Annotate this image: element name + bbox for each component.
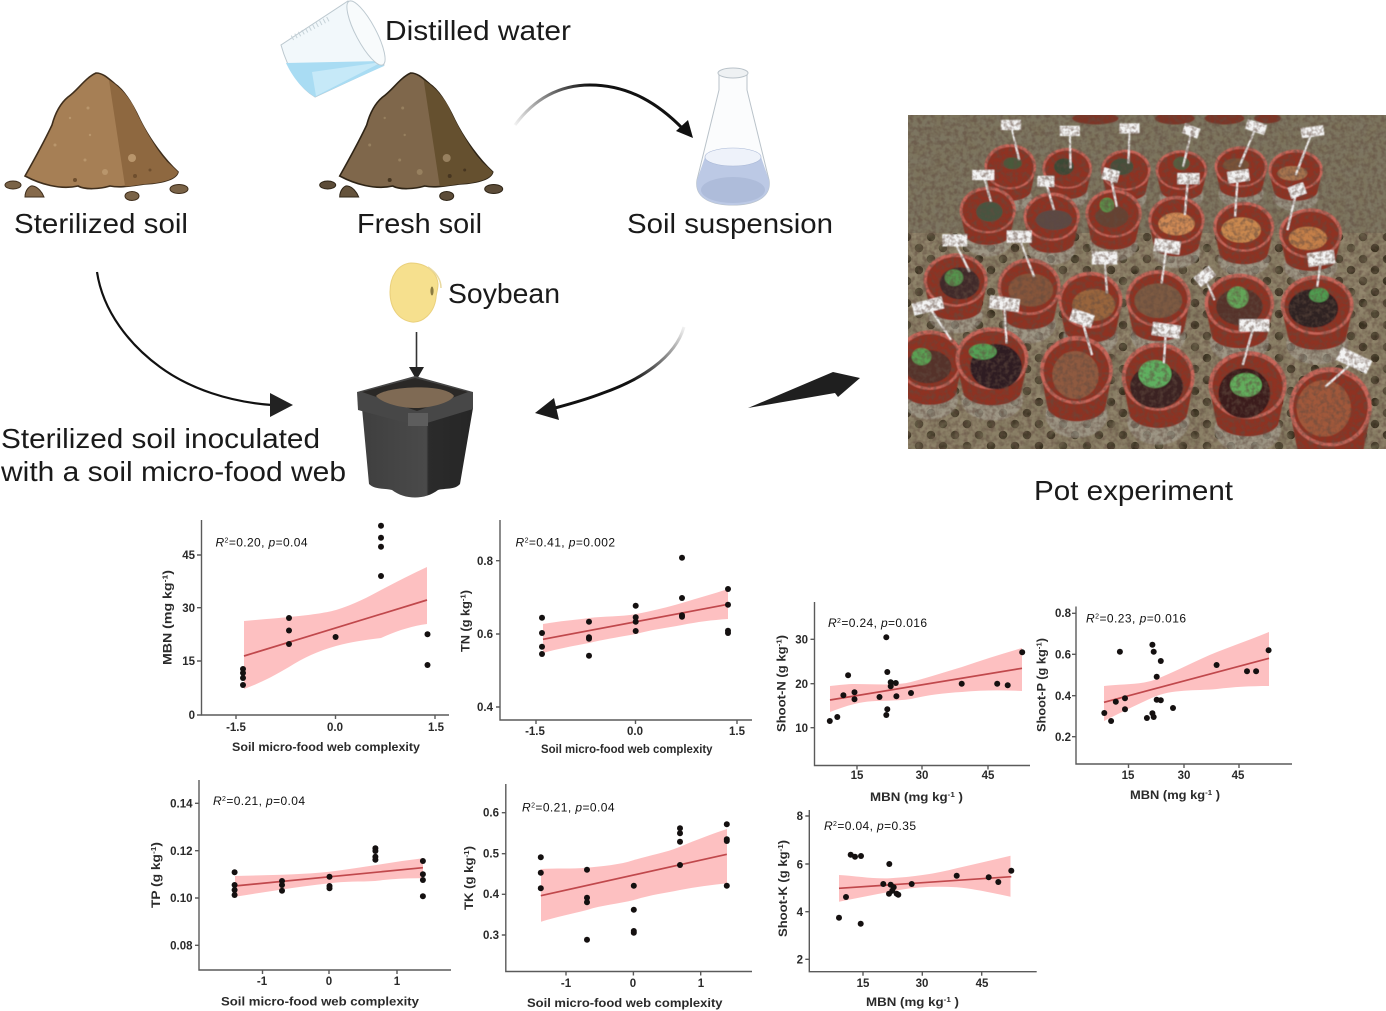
chart: TN vs soil micro-food web complexity: 0.8 <box>477 556 494 568</box>
chart: MBN vs soil micro-food web complexity: Soil micro-food web complexity <box>232 742 421 754</box>
chart: Shoot-P vs MBN: 0.4 <box>1055 691 1072 703</box>
icon: sterilized soil pile <box>5 73 188 200</box>
heading: Pot experiment: Pot experiment <box>1034 475 1233 506</box>
chart: TP vs soil micro-food web complexity: 0.12 <box>170 846 192 858</box>
chart: Shoot-N vs MBN: MBN (mg kg <box>870 792 937 804</box>
chart: MBN vs soil micro-food web complexity: MBN (mg kg <box>162 598 174 665</box>
chart: Shoot-P vs MBN: 0.2 <box>1055 732 1071 744</box>
chart: Shoot-K vs MBN <box>778 810 1037 1009</box>
chart: TN vs soil micro-food web complexity: 1.5 <box>729 726 746 738</box>
chart: Shoot-K vs MBN: -1 <box>944 997 951 1004</box>
chart: TP vs soil micro-food web complexity: =0.21, <box>226 794 266 808</box>
row 3 <box>924 253 988 333</box>
chart: TP vs soil micro-food web complexity: 1 <box>394 976 401 988</box>
chart: Shoot-P vs MBN: -1 <box>1036 642 1044 649</box>
chart: Shoot-K vs MBN: 2 <box>797 954 803 966</box>
chart: TN vs soil micro-food web complexity: =0.41, <box>529 536 568 550</box>
chart: Shoot-N vs MBN: R <box>828 616 837 630</box>
arrow: soybean to pot <box>409 332 424 380</box>
chart: Shoot-K vs MBN: MBN (mg kg <box>866 997 933 1009</box>
chart: Shoot-N vs MBN: =0.24, <box>841 616 881 630</box>
chart: TN vs soil micro-food web complexity: Soil micro-food web complexity <box>541 744 713 756</box>
chart: TN vs soil micro-food web complexity: TN (g kg <box>460 606 472 652</box>
arrow: to pot experiment <box>748 372 860 408</box>
chart: Shoot-P vs MBN: 45 <box>1232 770 1245 782</box>
chart: TK vs soil micro-food web complexity: =0.21, <box>535 800 575 814</box>
chart: MBN vs soil micro-food web complexity: 30 <box>182 603 195 615</box>
chart: MBN vs soil micro-food web complexity: ) <box>162 570 174 575</box>
chart: Shoot-K vs MBN: 6 <box>797 860 803 872</box>
chart: Shoot-P vs MBN: Shoot-P (g kg <box>1036 657 1048 732</box>
chart: Shoot-P vs MBN: 30 <box>1178 770 1190 782</box>
chart: TN vs soil micro-food web complexity: 0.0 <box>627 726 643 738</box>
chart: TK vs soil micro-food web complexity: -1 <box>464 850 471 858</box>
chart: Shoot-N vs MBN: ) <box>955 792 963 804</box>
chart: TK vs soil micro-food web complexity: Soil micro-food web complexity <box>527 998 723 1010</box>
chart: Shoot-N vs MBN: 45 <box>982 770 995 782</box>
icon: soybean seed <box>390 263 441 322</box>
chart: TK vs soil micro-food web complexity: 0.5 <box>483 848 500 860</box>
chart: MBN vs soil micro-food web complexity: 1.5 <box>428 722 445 734</box>
chart: MBN vs soil micro-food web complexity: 15 <box>182 656 196 668</box>
chart: Shoot-N vs MBN: -1 <box>776 639 784 646</box>
chart: Shoot-K vs MBN: 15 <box>857 978 870 990</box>
chart: Shoot-N vs MBN <box>776 602 1030 804</box>
chart: Shoot-K vs MBN: 45 <box>976 978 989 990</box>
heading: Sterilized soil inoculated with a soil micro-food web <box>0 423 346 487</box>
photo: pot experiment <box>908 115 1386 449</box>
chart: MBN vs soil micro-food web complexity: 45 <box>182 550 196 562</box>
chart: Shoot-P vs MBN: p=0.016 <box>1140 612 1186 626</box>
chart: TN vs soil micro-food web complexity: 2 <box>525 538 529 544</box>
chart: MBN vs soil micro-food web complexity: p=0.04 <box>269 536 308 550</box>
chart: Shoot-K vs MBN: 2 <box>833 821 837 828</box>
chart: TP vs soil micro-food web complexity: R <box>213 794 222 808</box>
chart: TP vs soil micro-food web complexity: 0.14 <box>170 798 193 810</box>
chart: Shoot-P vs MBN <box>1036 606 1292 802</box>
heading: Soybean: Soybean <box>448 278 560 309</box>
chart: TP vs soil micro-food web complexity: Soil micro-food web complexity <box>221 996 420 1008</box>
chart: Shoot-P vs MBN: =0.23, <box>1099 612 1139 626</box>
chart: Shoot-N vs MBN: 10 <box>795 723 808 735</box>
chart: Shoot-K vs MBN: -1 <box>778 844 785 851</box>
chart: TP vs soil micro-food web complexity: -1 <box>257 976 268 988</box>
chart: Shoot-K vs MBN: 4 <box>797 907 804 919</box>
chart: TN vs soil micro-food web complexity: p=0.002 <box>569 536 615 550</box>
chart: MBN vs soil micro-food web complexity: R <box>216 536 224 550</box>
chart: TK vs soil micro-food web complexity: 0.6 <box>483 808 499 820</box>
chart: Shoot-P vs MBN: ) <box>1036 638 1048 642</box>
chart: Shoot-N vs MBN: 2 <box>837 618 841 625</box>
chart: TN vs soil micro-food web complexity: ) <box>460 590 472 594</box>
chart: TK vs soil micro-food web complexity: TK (g kg <box>464 864 476 910</box>
chart: Shoot-N vs MBN: 30 <box>795 634 808 646</box>
heading: Sterilized soil inoculated with a soil micro-food web: with a soil micro-food web <box>0 456 346 487</box>
chart: TP vs soil micro-food web complexity: TP (g kg <box>151 863 163 908</box>
chart: Shoot-P vs MBN: 2 <box>1095 614 1099 620</box>
chart: MBN vs soil micro-food web complexity: 0.0 <box>327 722 343 734</box>
chart: Shoot-N vs MBN: 30 <box>916 770 928 782</box>
chart: Shoot-K vs MBN: Shoot-K (g kg <box>778 862 790 937</box>
chart: Shoot-P vs MBN: 0.8 <box>1055 608 1072 620</box>
chart: TK vs soil micro-food web complexity <box>464 784 752 1010</box>
icon: beaker pouring distilled water <box>281 0 392 97</box>
chart: TN vs soil micro-food web complexity <box>460 520 752 756</box>
chart: TK vs soil micro-food web complexity: 0.3 <box>483 930 499 942</box>
row 2 <box>960 187 1016 256</box>
chart: TP vs soil micro-food web complexity: -1 <box>151 846 158 854</box>
chart: TN vs soil micro-food web complexity: 0.4 <box>477 702 494 714</box>
back row <box>984 144 1036 212</box>
row 4 <box>908 330 960 420</box>
chart: Shoot-K vs MBN: R <box>824 819 833 833</box>
chart: TP vs soil micro-food web complexity: 0.08 <box>170 940 193 952</box>
chart: Shoot-K vs MBN: ) <box>951 997 959 1009</box>
chart: Shoot-K vs MBN: =0.04, <box>837 819 877 833</box>
chart: TP vs soil micro-food web complexity <box>151 780 451 1008</box>
chart: TN vs soil micro-food web complexity: -1.5 <box>525 726 546 738</box>
chart: TK vs soil micro-food web complexity: p=0.04 <box>575 800 614 814</box>
chart: TP vs soil micro-food web complexity: 0.10 <box>170 893 192 905</box>
chart: TP vs soil micro-food web complexity: p=0.04 <box>266 794 305 808</box>
arrow: sterilized soil to pot <box>97 272 293 417</box>
chart: TK vs soil micro-food web complexity: 1 <box>698 978 705 990</box>
chart: Shoot-P vs MBN: 0.6 <box>1055 650 1071 662</box>
chart: TK vs soil micro-food web complexity: 2 <box>531 802 535 810</box>
chart: TK vs soil micro-food web complexity: R <box>522 800 531 814</box>
chart: MBN vs soil micro-food web complexity: 2 <box>225 538 229 544</box>
chart: MBN vs soil micro-food web complexity: =0.20, <box>229 536 268 550</box>
chart: TK vs soil micro-food web complexity: 0 <box>630 978 636 990</box>
chart: TK vs soil micro-food web complexity: 0.4 <box>483 889 500 901</box>
icon: flask with soil suspension <box>697 68 769 205</box>
chart: TN vs soil micro-food web complexity: 0.6 <box>477 629 493 641</box>
chart: Shoot-N vs MBN: Shoot-N (g kg <box>776 657 788 732</box>
chart: Shoot-N vs MBN: ) <box>776 635 788 639</box>
chart: MBN vs soil micro-food web complexity <box>162 520 449 754</box>
chart: TP vs soil micro-food web complexity: 2 <box>222 796 226 803</box>
chart: Shoot-P vs MBN: 15 <box>1122 770 1135 782</box>
heading: Fresh soil: Fresh soil <box>357 208 482 239</box>
heading: Sterilized soil: Sterilized soil <box>14 208 188 239</box>
arrow: fresh soil to soil suspension <box>515 85 693 138</box>
icon: fresh soil pile <box>320 73 503 200</box>
chart: Shoot-N vs MBN: -1 <box>948 792 955 799</box>
chart: Shoot-K vs MBN: p=0.35 <box>877 819 916 833</box>
chart: TK vs soil micro-food web complexity: ) <box>464 846 476 850</box>
chart: Shoot-P vs MBN: ) <box>1212 790 1220 802</box>
chart: TP vs soil micro-food web complexity: 0 <box>326 976 332 988</box>
chart: TP vs soil micro-food web complexity: ) <box>151 842 163 847</box>
chart: TK vs soil micro-food web complexity: -1 <box>561 978 572 990</box>
chart: Shoot-P vs MBN: R <box>1086 612 1095 626</box>
chart: Shoot-N vs MBN: 20 <box>795 679 808 691</box>
chart: Shoot-K vs MBN: 30 <box>916 978 928 990</box>
arrow: soil suspension to pot <box>535 327 684 420</box>
chart: MBN vs soil micro-food web complexity: 0 <box>189 710 195 722</box>
heading: Sterilized soil inoculated with a soil micro-food web: Sterilized soil inoculated <box>1 423 320 454</box>
chart: Shoot-P vs MBN: MBN (mg kg <box>1130 790 1197 802</box>
chart: MBN vs soil micro-food web complexity: -1.5 <box>226 722 247 734</box>
chart: TN vs soil micro-food web complexity: -1 <box>460 594 468 601</box>
icon: black plant pot with soil <box>357 376 473 498</box>
chart: TN vs soil micro-food web complexity: R <box>516 536 524 550</box>
heading: Soil suspension: Soil suspension <box>627 208 833 239</box>
chart: MBN vs soil micro-food web complexity: -1 <box>162 575 170 582</box>
chart: Shoot-K vs MBN: ) <box>778 840 790 844</box>
chart: Shoot-N vs MBN: 15 <box>851 770 864 782</box>
chart: Shoot-P vs MBN: -1 <box>1205 790 1212 797</box>
chart: Shoot-N vs MBN: p=0.016 <box>881 616 927 630</box>
heading: Distilled water: Distilled water <box>385 15 571 46</box>
chart: Shoot-K vs MBN: 8 <box>797 811 804 823</box>
